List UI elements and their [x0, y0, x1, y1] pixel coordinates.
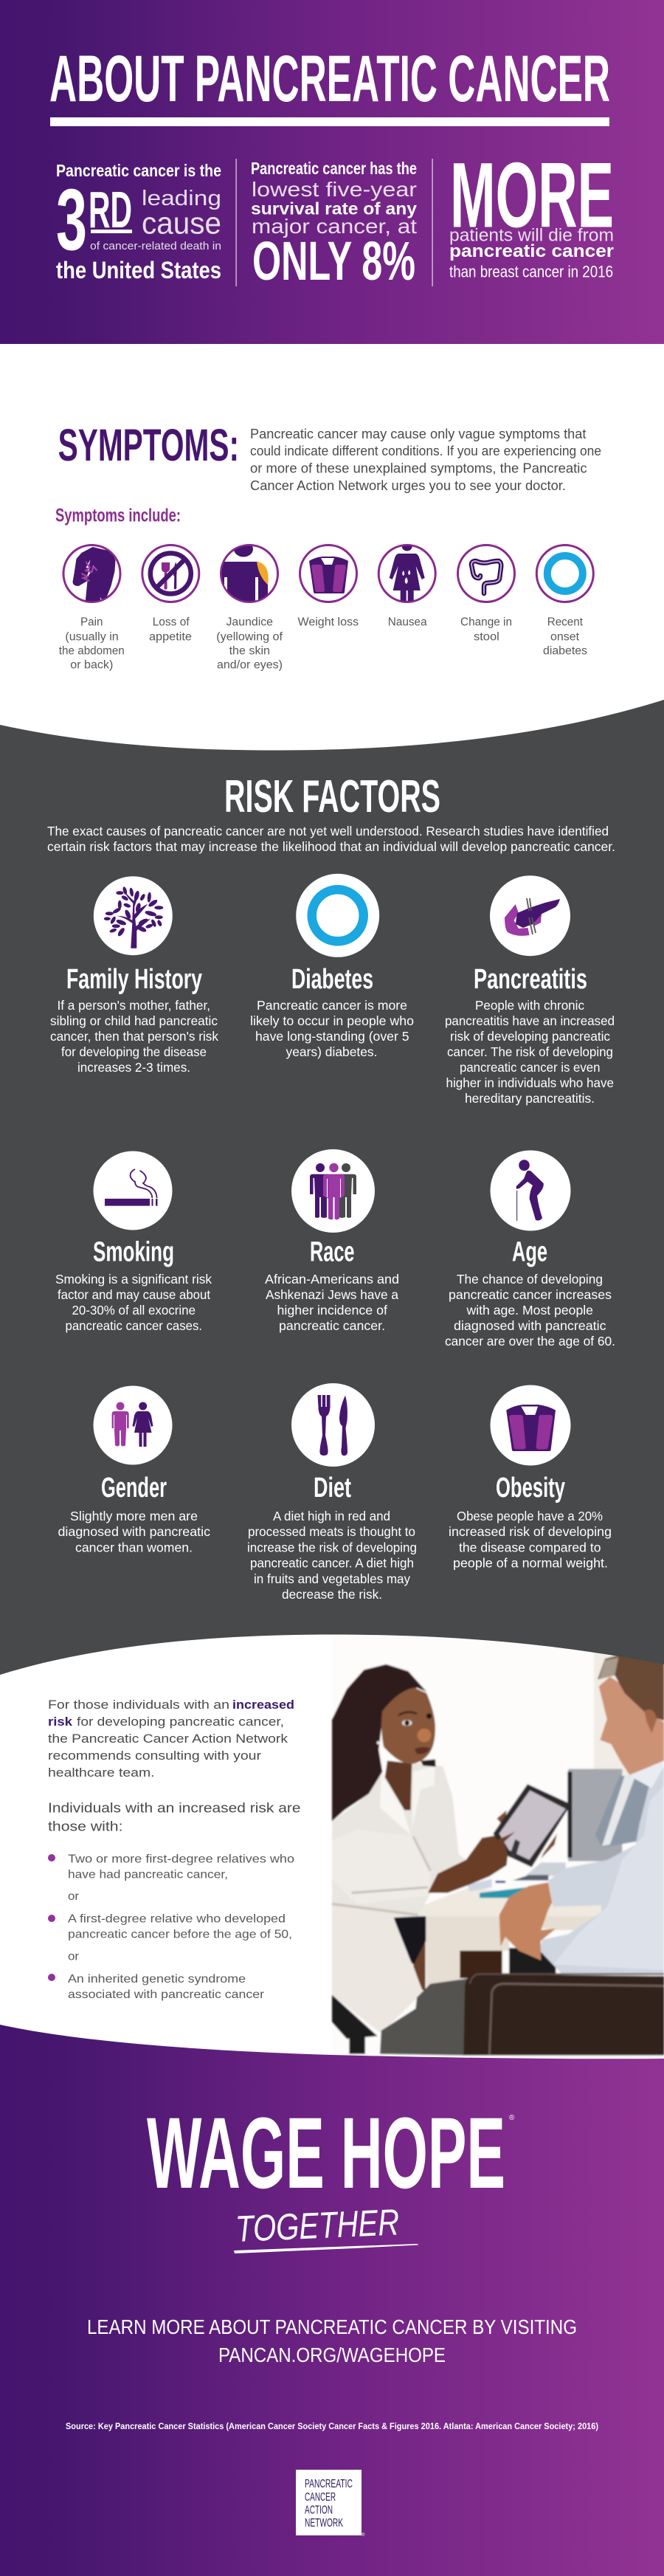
panel: symptoms [55, 420, 601, 672]
logo: pancreatic cancer action network: NETWORK [305, 2517, 343, 2529]
text: diet body: increase the risk of developing [247, 1540, 417, 1554]
text: age body: The chance of developing [457, 1272, 603, 1287]
label: jaundice [216, 616, 283, 672]
stat: 3rd leading cause: of cancer-related death in [90, 240, 221, 252]
text: pancreatitis body: higher in individuals who have [446, 1075, 614, 1090]
icon: elderly person [490, 1150, 571, 1231]
face [381, 1687, 435, 1764]
text: symptoms intro: or more of these unexplained symptoms, the Pancreatic [250, 461, 587, 476]
doctor hair [332, 1664, 426, 1821]
text: race body: African-Americans and [265, 1272, 399, 1287]
text: risk factors intro: certain risk factors that may increase the likelihood that an individual will develop pancreatic cancer. [47, 839, 615, 854]
text: diet body: processed meats is thought to [248, 1524, 415, 1539]
photo: doctor and patient [332, 1631, 664, 2061]
text: age body: cancer are over the age of 60. [445, 1334, 615, 1349]
text: race body: pancreatic cancer. [279, 1318, 385, 1333]
stat: only 8% survival [251, 159, 417, 292]
label: change in stool [460, 616, 512, 643]
text: diabetes body: Pancreatic cancer is more [257, 998, 407, 1013]
call to action: PANCAN.ORG/WAGEHOPE [218, 2343, 446, 2366]
heading: diet: Diet [314, 1473, 351, 1504]
text: symptoms intro: could indicate different conditions. If you are experiencing one [250, 444, 601, 458]
text: smoking body: 20-30% of all exocrine [72, 1303, 196, 1318]
panel: increased risk [48, 1698, 301, 2001]
text: family history body: If a person's mother, father, [58, 998, 210, 1013]
label: loss of appetite: appetite [149, 630, 192, 643]
text: gender body: diagnosed with pancreatic [58, 1524, 210, 1539]
text: pancreatitis body [445, 998, 615, 1106]
risk: pancreatitis [445, 875, 615, 1106]
risk: diet [247, 1383, 417, 1602]
label: pain: Pain [80, 616, 103, 629]
tablet [497, 1811, 507, 1827]
text: family history body: cancer, then that person's risk [50, 1029, 218, 1044]
heading: risk factors: RISK FACTORS [224, 771, 440, 822]
risk: obesity [449, 1385, 612, 1571]
text: diabetes body: likely to occur in people who [250, 1013, 414, 1028]
source note: Source: Key Pancreatic Cancer Statistics (American Cancer Society Cancer Facts & Figures 2016. Atlanta: American Cancer Society; 2016) [66, 2422, 598, 2431]
text: obesity body: increased risk of developing [449, 1524, 612, 1539]
label: change in stool: stool [474, 630, 499, 643]
stat: 3rd leading cause: leading [142, 187, 221, 210]
label: pain: or back) [70, 659, 113, 672]
icon: jaundice [221, 542, 277, 604]
text: symptoms intro: Cancer Action Network urges you to see your doctor. [250, 478, 566, 493]
label: jaundice: Jaundice [226, 616, 273, 629]
text: gender body: Slightly more men are [70, 1509, 198, 1523]
list: risk criteria: pancreatic cancer before the age of 50, [68, 1929, 292, 1941]
patient chair [463, 1974, 664, 2056]
panel: header [0, 0, 664, 344]
label: jaundice: (yellowing of [216, 630, 283, 643]
text: symptoms intro: Pancreatic cancer may cause only vague symptoms that [250, 427, 586, 441]
text: risk factors intro [47, 824, 615, 854]
label: pain: (usually in [65, 630, 119, 643]
risk: race [265, 1149, 399, 1333]
text: race body: Ashkenazi Jews have a [266, 1287, 398, 1302]
stat: only 8% survival: lowest five-year [252, 178, 417, 201]
risk: diabetes [250, 874, 414, 1059]
text: pancreatitis body: People with chronic [475, 998, 584, 1013]
heading: family history: Family History [66, 964, 202, 995]
text: symptoms intro [250, 427, 601, 493]
text: recommendation: increased [232, 1698, 294, 1712]
label: recent onset diabetes: Recent [547, 616, 584, 629]
text: pancreatitis body: cancer. The risk of developing [447, 1044, 613, 1059]
text: individuals at increased risk [48, 1801, 301, 1833]
logo: pancreatic cancer action network: ACTION [305, 2504, 333, 2517]
text: obesity body: people of a normal weight. [453, 1556, 608, 1571]
icon: man and woman [93, 1386, 173, 1464]
call to action [87, 2315, 577, 2366]
text: gender body: cancer than women. [75, 1540, 193, 1554]
doctor skirt and leg [393, 1916, 426, 1966]
stat: 3rd leading cause: RD [89, 181, 132, 238]
text: smoking body [55, 1272, 212, 1333]
label: recent onset diabetes [543, 616, 587, 657]
risk: gender [58, 1386, 210, 1554]
heading: pancreatitis: Pancreatitis [474, 964, 587, 995]
text: age body: pancreatic cancer increases [449, 1287, 612, 1302]
stat: 3rd leading cause: the United States [56, 257, 221, 283]
label: jaundice: and/or eyes) [217, 659, 283, 672]
text: recommendation: the Pancreatic Cancer Action Network [48, 1732, 288, 1746]
text: diet body [247, 1509, 417, 1602]
text: gender body [58, 1509, 210, 1554]
stat: only 8% survival: ONLY 8% [252, 230, 415, 292]
icon: weight loss [300, 545, 357, 602]
text: diabetes body: years) diabetes. [286, 1044, 378, 1059]
label: change in stool: Change in [460, 616, 512, 629]
text: family history body: increases 2-3 times. [77, 1060, 190, 1075]
stat: 3rd leading cause: 3 [56, 171, 87, 269]
trousers [380, 1978, 470, 2056]
text: pancreatitis body: pancreatitis have an increased [445, 1013, 615, 1028]
text: diet body: pancreatic cancer. A diet high [250, 1556, 414, 1571]
list: risk criteria: Two or more first-degree relatives who [68, 1853, 294, 1865]
stat: only 8% survival: survival rate of any [251, 199, 417, 218]
heading: diabetes: Diabetes [291, 964, 373, 995]
text: pancreatitis body: risk of developing pancreatic [450, 1029, 610, 1044]
label: pain: the abdomen [59, 644, 125, 657]
text: recommendation: for developing pancreatic cancer, [77, 1715, 284, 1729]
icon: scale [490, 1385, 571, 1466]
stat: more patients: than breast cancer in 2016 [449, 263, 613, 281]
text: recommendation: healthcare team. [48, 1766, 155, 1780]
text: age body [445, 1272, 615, 1349]
call to action: LEARN MORE ABOUT PANCREATIC CANCER BY VISITING [87, 2315, 577, 2338]
heading: gender: Gender [101, 1473, 167, 1504]
text: smoking body: Smoking is a significant risk [55, 1272, 212, 1287]
icon: pain [63, 545, 120, 603]
risk: family history [50, 876, 218, 1075]
stat: 3rd leading cause: cause [142, 206, 221, 241]
icon: loss of appetite [142, 545, 199, 602]
text: obesity body: the disease compared to [459, 1540, 601, 1554]
text: family history body: for developing the disease [61, 1044, 207, 1059]
text: recommendation: recommends consulting with your [48, 1749, 261, 1763]
icon: recent onset diabetes [536, 545, 593, 602]
text: diet body: A diet high in red and [273, 1509, 390, 1523]
text: pancreatitis body: pancreatic cancer is even [460, 1060, 601, 1075]
icon: pancreas [490, 875, 570, 956]
stat: only 8% survival: major cancer, at [252, 215, 417, 238]
logo: wage hope: ® [509, 2114, 515, 2122]
list: risk criteria: An inherited genetic syndrome [68, 1973, 246, 1986]
label: nausea: Nausea [388, 616, 427, 629]
text: obesity body: Obese people have a 20% [457, 1509, 603, 1523]
text: recommendation [48, 1698, 294, 1780]
patient shirt [540, 1763, 664, 1974]
stat: 3rd leading cause [56, 161, 221, 283]
text: individuals at increased risk: those with: [48, 1819, 122, 1833]
label: loss of appetite: Loss of [153, 616, 190, 629]
text: family history body: sibling or child had pancreatic [50, 1013, 218, 1028]
stat: more patients: pancreatic cancer [449, 241, 614, 261]
list: risk criteria: or [68, 1890, 80, 1903]
list: risk criteria [48, 1853, 294, 2001]
icon: blue circle [296, 874, 379, 957]
doctor chair [332, 1995, 378, 2039]
logo: together: TOGETHER [235, 2201, 400, 2250]
list: risk criteria: associated with pancreatic cancer [68, 1988, 265, 2001]
text: individuals at increased risk: Individuals with an increased risk are [48, 1801, 301, 1816]
icon: nausea [378, 542, 435, 602]
heading: symptoms: SYMPTOMS: [58, 420, 239, 470]
text: age body: with age. Most people [466, 1303, 593, 1318]
heading: race: Race [310, 1237, 354, 1268]
text: race body [265, 1272, 399, 1333]
text: family history body [50, 998, 218, 1075]
label: loss of appetite [149, 616, 192, 643]
monitor [567, 1769, 651, 1862]
stat: 3rd leading cause: Pancreatic cancer is the [56, 161, 221, 180]
text: diabetes body: have long-standing (over 5 [255, 1029, 409, 1044]
heading: obesity: Obesity [496, 1473, 565, 1504]
risk: smoking [55, 1151, 212, 1333]
logo: pancreatic cancer action network [296, 2470, 365, 2538]
icon: change in stool [457, 545, 515, 602]
text: diet body: in fruits and vegetables may [254, 1571, 410, 1586]
heading: age: Age [512, 1237, 547, 1268]
neck [385, 1760, 412, 1811]
text: race body: higher incidence of [277, 1303, 387, 1318]
text: diabetes body [250, 998, 414, 1059]
text: recommendation: risk [48, 1715, 73, 1729]
icon: three people [291, 1149, 375, 1233]
list: risk criteria: have had pancreatic cancer, [68, 1868, 228, 1881]
list: risk criteria: or [68, 1950, 80, 1963]
subheading: symptoms include: Symptoms include: [55, 506, 181, 526]
text: obesity body [449, 1509, 612, 1571]
logo: pancreatic cancer action network: PANCREATIC [305, 2478, 353, 2490]
text: risk factors intro: The exact causes of pancreatic cancer are not yet well understood. Research studies have identified [47, 824, 609, 838]
text: diet body: decrease the risk. [282, 1587, 382, 1602]
doctor coat [332, 1763, 466, 2033]
stat: more patients [449, 145, 614, 281]
patient hands [499, 1882, 556, 1960]
logo: pancreatic cancer action network: CANCER [305, 2491, 336, 2504]
stat: more patients: patients will die from [449, 226, 614, 246]
risk: age [445, 1150, 615, 1349]
label: weight loss: Weight loss [298, 616, 359, 629]
text: smoking body: factor and may cause about [58, 1287, 210, 1302]
text: age body: diagnosed with pancreatic [454, 1318, 606, 1333]
icon: fork and knife [291, 1383, 375, 1467]
text: pancreatitis body: hereditary pancreatitis. [465, 1091, 595, 1106]
logo: pancreatic cancer action network: ® [362, 2532, 365, 2538]
label: recent onset diabetes: diabetes [543, 644, 587, 657]
panel: risk factors [0, 700, 664, 1675]
list: risk criteria: A first-degree relative who developed [68, 1913, 286, 1925]
panel: footer [0, 2025, 664, 2576]
heading: smoking: Smoking [93, 1237, 174, 1268]
desk [419, 1887, 603, 1918]
icon: cigarette [93, 1151, 173, 1230]
text: smoking body: pancreatic cancer cases. [65, 1318, 202, 1333]
icon: tree [94, 876, 173, 955]
stat: only 8% survival: Pancreatic cancer has the [251, 159, 417, 178]
text: recommendation: For those individuals with an [48, 1698, 229, 1712]
patient head [599, 1677, 664, 1775]
doctor arm [428, 1832, 514, 1893]
label: pain [59, 616, 125, 672]
label: jaundice: the skin [229, 644, 270, 657]
label: recent onset diabetes: onset [550, 630, 580, 643]
